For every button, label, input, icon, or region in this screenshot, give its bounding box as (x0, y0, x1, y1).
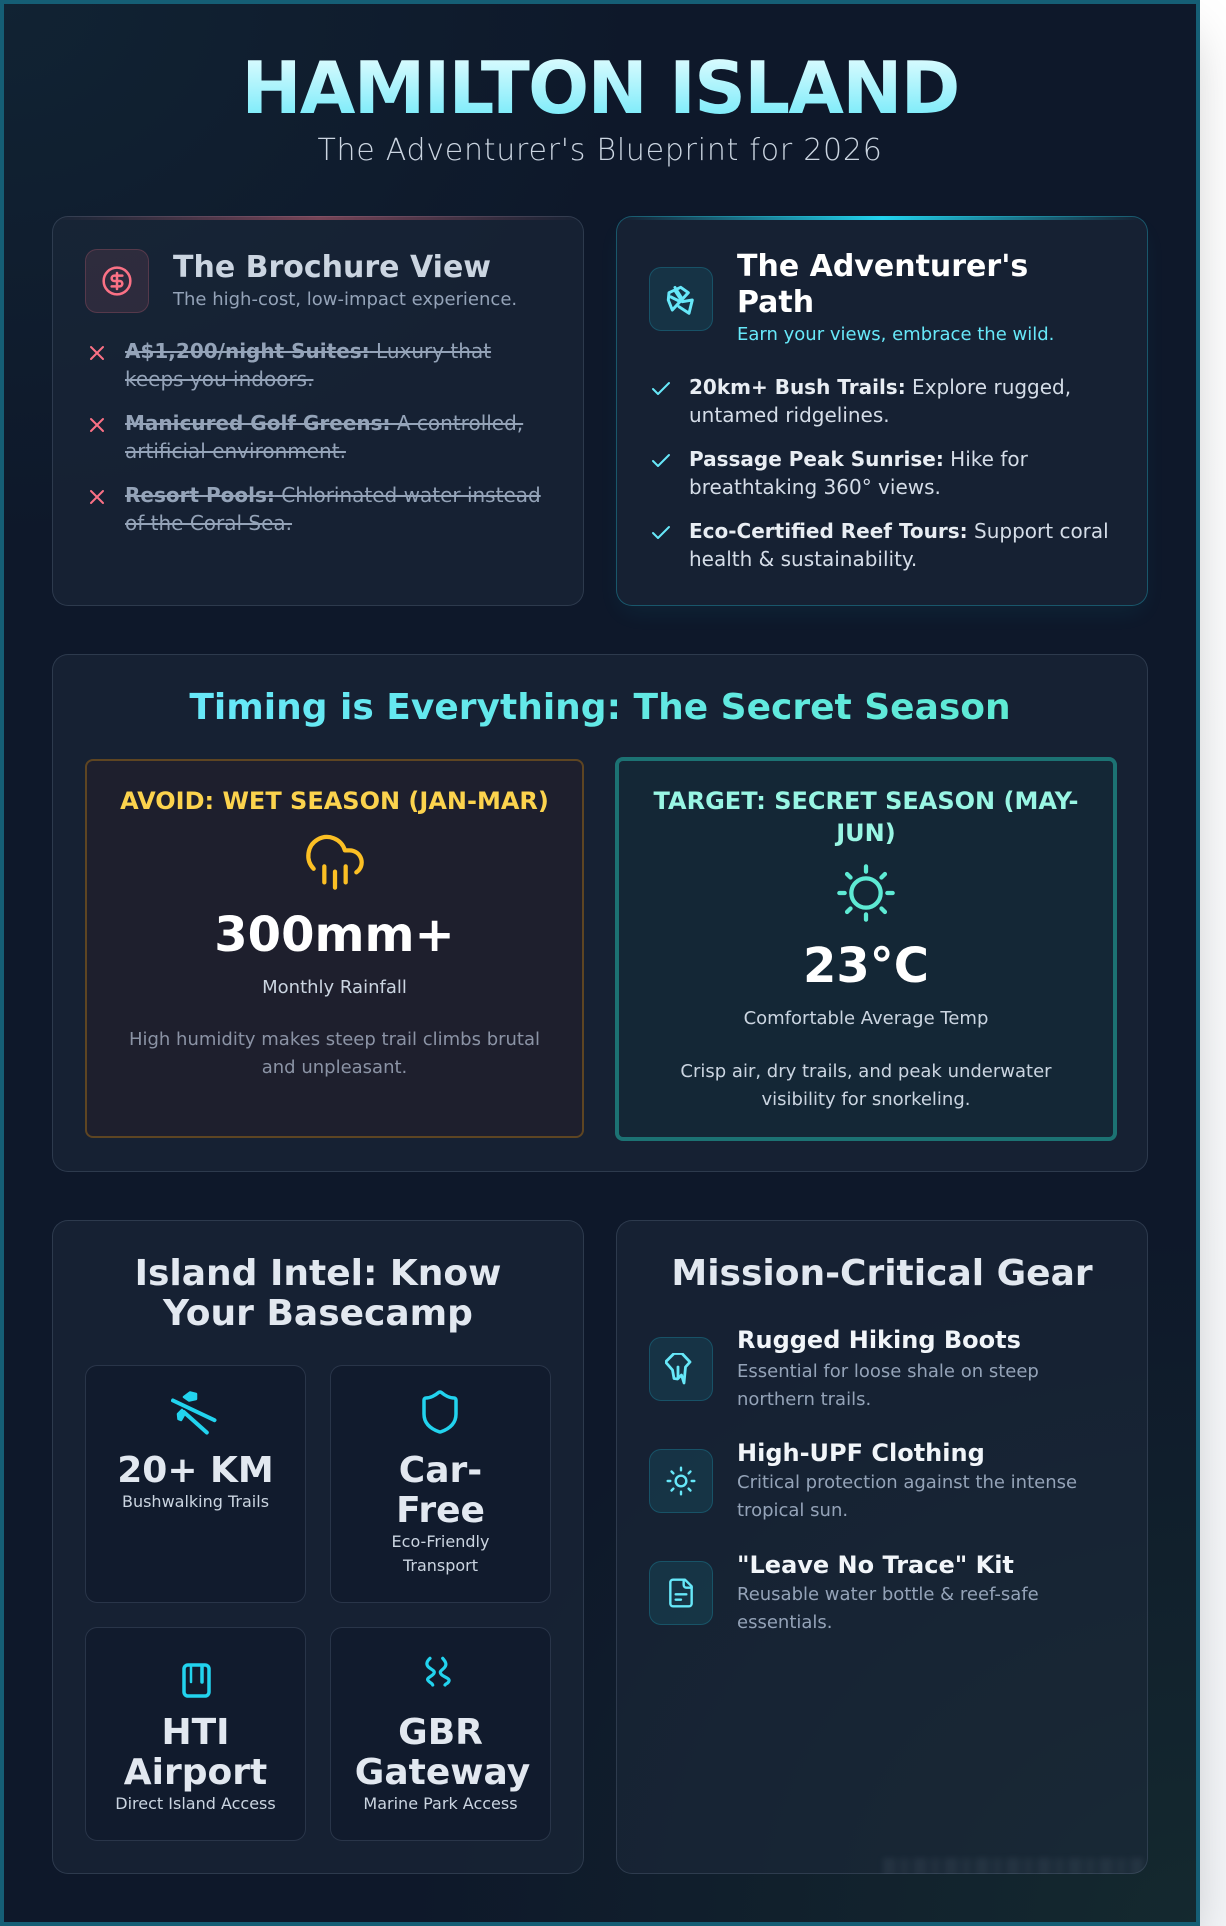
item text: tropical sun. (737, 1500, 848, 1521)
list item: suites: A$1,200/night Suites: Luxury that (125, 339, 491, 363)
stat label: Marine Park Access (363, 1794, 518, 1813)
stat: Car- (399, 1450, 482, 1491)
stat label: Comfortable Average Temp (744, 1008, 988, 1029)
description: and unpleasant. (262, 1057, 407, 1078)
list item: pools: of the Coral Sea. (125, 511, 292, 535)
list item: sunrise: breathtaking 360° views. (689, 475, 941, 499)
title: HAMILTON ISLAND (241, 46, 959, 130)
list item: trails: 20km+ Bush Trails: Explore rugged, (689, 375, 1071, 399)
tile: reef gateway (330, 1627, 551, 1841)
panel: island intel (52, 1220, 584, 1874)
card heading: AVOID: WET SEASON (JAN-MAR) (120, 787, 549, 815)
stat label: Transport (403, 1556, 478, 1575)
stat: 23°C (803, 938, 929, 994)
list item: golf: Manicured Golf Greens: A controlled, (125, 411, 523, 435)
subtitle: The Adventurer's Blueprint for 2026 (317, 133, 883, 168)
description: High humidity makes steep trail climbs brutal (129, 1029, 540, 1050)
description: Crisp air, dry trails, and peak underwater (680, 1061, 1052, 1082)
item text: northern trails. (737, 1389, 871, 1410)
list item: pools: Resort Pools: Chlorinated water instead (125, 483, 541, 507)
accent strip (52, 216, 584, 220)
section heading: Mission-Critical Gear (671, 1253, 1093, 1294)
icon: boot (649, 1337, 713, 1401)
icon: sun (649, 1449, 713, 1513)
item title: High-UPF Clothing (737, 1439, 985, 1467)
item title: Rugged Hiking Boots (737, 1326, 1021, 1354)
stat: Free (396, 1490, 485, 1531)
gear item: clothing (649, 1439, 1077, 1521)
stat label: Bushwalking Trails (122, 1492, 269, 1511)
icon: shield (422, 1390, 458, 1434)
accent strip (624, 216, 1140, 220)
heading (737, 249, 1028, 320)
card heading (654, 787, 1078, 847)
panel: the adventurer's path (616, 216, 1148, 606)
description: Earn your views, embrace the wild. (737, 324, 1054, 345)
panel: timing (52, 654, 1148, 1172)
tile: car free (330, 1365, 551, 1603)
icon: waves (425, 1656, 451, 1687)
list item: trails: untamed ridgelines. (689, 403, 890, 427)
item title: "Leave No Trace" Kit (737, 1551, 1014, 1579)
heading: The Brochure View (173, 250, 491, 285)
list item: reef tours: health & sustainability. (689, 547, 917, 571)
gear item: kit (649, 1551, 1039, 1633)
stat: Gateway (355, 1752, 530, 1793)
stat label: Monthly Rainfall (262, 977, 407, 998)
card: wet season (85, 759, 584, 1138)
icon: document (649, 1561, 713, 1625)
section heading: Your Basecamp (163, 1293, 473, 1334)
item text (737, 1472, 1077, 1521)
list item: sunrise (652, 447, 1028, 499)
list item: trails (652, 375, 1071, 427)
stat: GBR (398, 1712, 483, 1753)
stat: 20+ KM (117, 1450, 274, 1491)
section heading: Timing is Everything: The Secret Season (189, 687, 1011, 728)
icon: rain cloud (306, 834, 364, 890)
list item: reef tours (652, 519, 1109, 571)
stat label (392, 1532, 489, 1575)
panel: the brochure view (52, 216, 584, 606)
icon: boarding pass (182, 1663, 211, 1698)
tile: trails (85, 1365, 306, 1603)
stat (355, 1712, 530, 1793)
card heading: JUN) (836, 819, 896, 847)
description (680, 1061, 1052, 1110)
list item: pools (90, 483, 541, 535)
heading: The Adventurer's (737, 249, 1028, 284)
stat label: Eco-Friendly (392, 1532, 489, 1551)
icon: sun (837, 864, 895, 922)
panel: mission-critical gear (616, 1220, 1148, 1874)
description (129, 1029, 540, 1078)
item text: Reusable water bottle & reef-safe (737, 1584, 1039, 1605)
gear item: boots (649, 1326, 1039, 1410)
card heading: TARGET: SECRET SEASON (MAY- (654, 787, 1078, 815)
icon: dollar coin (85, 249, 149, 313)
item text (737, 1584, 1039, 1633)
list item: suites: keeps you indoors. (125, 367, 313, 391)
item text (737, 1361, 1039, 1410)
description: visibility for snorkeling. (762, 1089, 970, 1110)
stat: 300mm+ (214, 907, 455, 963)
stat: Airport (124, 1752, 267, 1793)
list item: suites (90, 339, 492, 391)
list item: golf: artificial environment. (125, 439, 346, 463)
list item: reef tours: Eco-Certified Reef Tours: Support coral (689, 519, 1109, 543)
icon: hiking poles (171, 1391, 217, 1435)
icon: mountain route (649, 267, 713, 331)
list item: sunrise: Passage Peak Sunrise: Hike for (689, 447, 1028, 471)
item text: essentials. (737, 1612, 833, 1633)
stat: HTI (161, 1712, 230, 1753)
list item: golf (90, 411, 524, 463)
tile: airport (85, 1627, 306, 1841)
stat (124, 1712, 267, 1793)
item text: Essential for loose shale on steep (737, 1361, 1039, 1382)
stat (396, 1450, 485, 1531)
item text: Critical protection against the intense (737, 1472, 1077, 1493)
section heading: Island Intel: Know (135, 1253, 501, 1294)
card: secret season (615, 757, 1117, 1141)
heading: Path (737, 285, 814, 320)
section heading (135, 1253, 501, 1334)
stat label: Direct Island Access (115, 1794, 276, 1813)
description: The high-cost, low-impact experience. (173, 289, 517, 310)
